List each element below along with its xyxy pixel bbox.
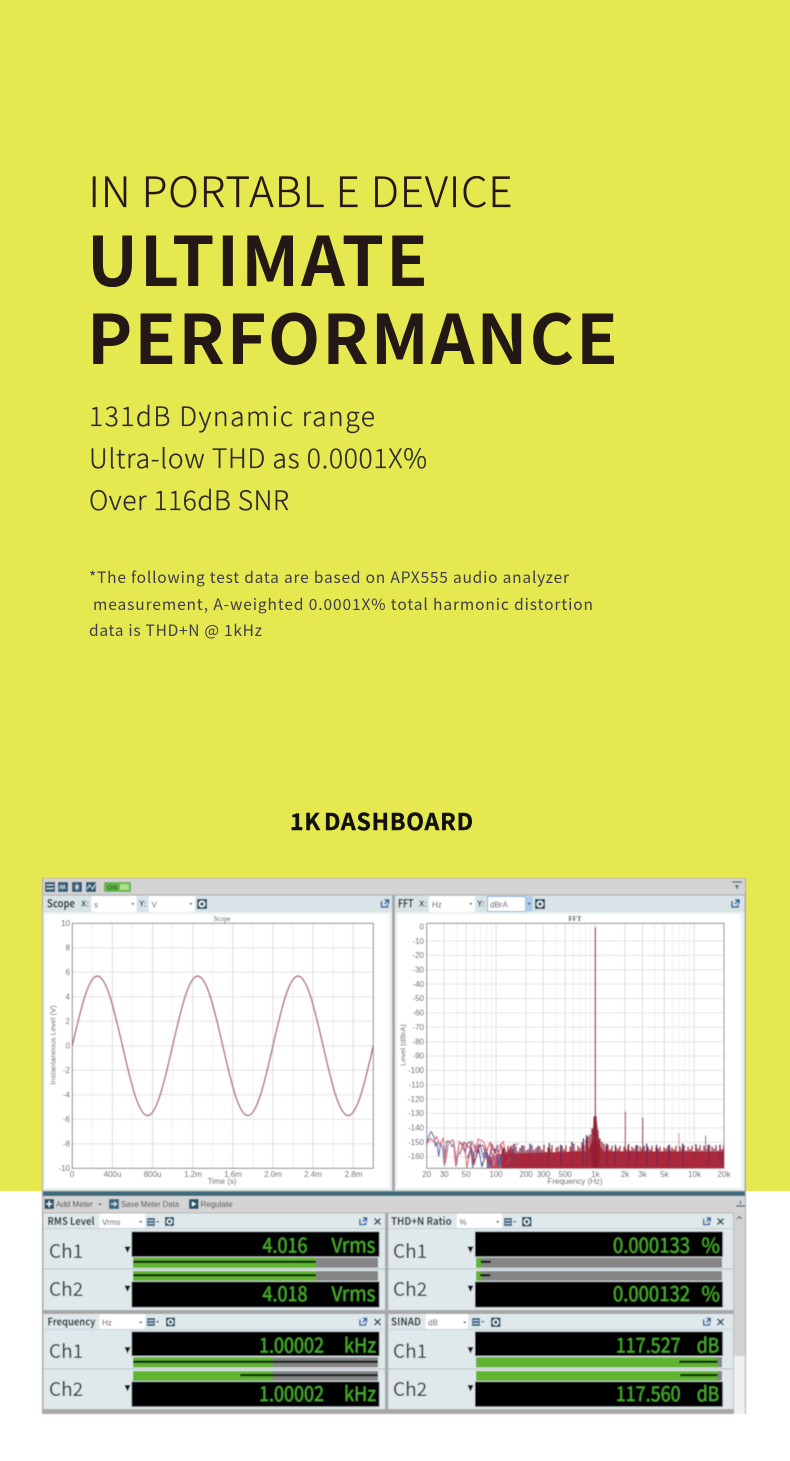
- panel: FFT: [395, 896, 744, 1190]
- FFT x axis labels: Frequency (Hz): [547, 1177, 603, 1186]
- panel: FFT: FFT: [568, 915, 582, 923]
- scope x axis labels: 400u: [104, 1170, 121, 1179]
- meter: THD+N ratio: [388, 1213, 733, 1310]
- scope y axis labels: 10: [61, 919, 71, 928]
- meter: THD+N ratio: Ch2: [393, 1275, 427, 1302]
- FFT header: X:: [419, 900, 427, 908]
- panel: FFT: Level (dBrA): [398, 1024, 408, 1066]
- harmonic spurs: [624, 1112, 627, 1152]
- meter: SINAD: [388, 1314, 733, 1409]
- meter: THD+N ratio: %: [702, 1278, 720, 1307]
- FFT y axis labels: -140: [408, 1124, 425, 1132]
- meter: frequency: kHz: [344, 1378, 376, 1407]
- meter: RMS level: 4.016: [262, 1230, 308, 1258]
- FFT y axis labels: -30: [412, 966, 425, 974]
- scope header: Y:: [139, 900, 146, 908]
- readout ch2: [132, 1282, 379, 1307]
- feature list: [89, 395, 427, 518]
- scope header: s: [94, 900, 98, 910]
- meter: SINAD: dB: [697, 1329, 719, 1358]
- meter: SINAD: dB: [428, 1318, 438, 1328]
- meter: SINAD: SINAD: [391, 1314, 421, 1330]
- heading block: [87, 159, 618, 384]
- meter: THD+N ratio: Ch1: [393, 1237, 427, 1264]
- FFT x axis labels: 30: [440, 1170, 449, 1179]
- noise floor backing: [487, 1138, 724, 1168]
- meter: SINAD: Ch1: [393, 1337, 427, 1364]
- scope sine wave: [72, 976, 373, 1116]
- FFT y axis labels: -80: [412, 1038, 425, 1046]
- FFT header: Hz: [432, 900, 442, 910]
- meter: SINAD: Ch2: [393, 1375, 427, 1402]
- meter: RMS level: Vrms: [332, 1230, 376, 1258]
- analyzer screenshot: [42, 878, 746, 1414]
- meter: RMS level: [44, 1213, 385, 1310]
- meter: RMS level: Vrms: [102, 1218, 120, 1227]
- scope x axis labels: 2.0m: [264, 1170, 282, 1179]
- FFT y axis labels: -160: [408, 1152, 425, 1161]
- FFT x axis labels: 20k: [718, 1170, 731, 1179]
- readout ch1: [132, 1232, 379, 1257]
- footnote text: measurement, A-weighted 0.0001X% total harmonic distortion: [93, 593, 593, 615]
- scope x axis labels: 2.8m: [345, 1170, 363, 1179]
- meter: THD+N ratio: 0.000132: [613, 1278, 690, 1307]
- red noise comb: [502, 1117, 724, 1168]
- scope header: Scope: [47, 896, 75, 912]
- scrollbar: [734, 1212, 745, 1414]
- FFT x axis labels: 300: [537, 1170, 551, 1179]
- FFT y axis labels: -110: [409, 1080, 425, 1090]
- section heading: 1K dashboard: 1K DASHBOARD: [290, 803, 473, 837]
- panel: scope: Instantaneous Level (V): [48, 1005, 58, 1085]
- scope y axis labels: -8: [63, 1140, 71, 1148]
- scope header: V: [152, 900, 158, 910]
- panel: scope: Scope: [213, 915, 231, 923]
- FFT spectrum traces: [427, 927, 724, 1168]
- footnote text: *The following test data are based on APX555 audio analyzer: [89, 566, 570, 588]
- FFT x axis labels: 10k: [688, 1170, 702, 1179]
- FFT y axis labels: -40: [412, 980, 425, 989]
- FFT x axis labels: 20: [422, 1170, 432, 1179]
- FFT header: Y:: [477, 900, 484, 908]
- fundamental 1 kHz peak: [593, 927, 597, 1168]
- footnote text: data is THD+N @ 1kHz: [89, 619, 262, 641]
- FFT y axis labels: -20: [412, 951, 425, 960]
- blue noise tops: [514, 1135, 720, 1165]
- meter: frequency: [44, 1314, 385, 1409]
- FFT x axis labels: 100: [489, 1170, 503, 1179]
- FFT y axis labels: -90: [412, 1052, 425, 1060]
- feature: dynamic range: 131dB Dynamic range: [89, 395, 375, 434]
- top toolbar: [43, 878, 745, 894]
- meter: THD+N ratio: 0.000133: [613, 1230, 690, 1258]
- scope x axis labels: Time (s): [207, 1177, 237, 1186]
- meter toolbar: Save Meter Data: [121, 1200, 180, 1209]
- FFT y axis labels: -70: [412, 1023, 425, 1032]
- scope x axis labels: 800u: [144, 1170, 161, 1179]
- scope x axis labels: [70, 1170, 363, 1186]
- scope x axis labels: 2.4m: [304, 1170, 322, 1179]
- FFT y axis labels: [408, 922, 425, 1161]
- meter: RMS level: RMS Level: [48, 1214, 95, 1229]
- feature: SNR: Over 116dB SNR: [89, 479, 289, 518]
- meter: THD+N ratio: %: [460, 1218, 467, 1227]
- meter: frequency: 1.00002: [259, 1329, 324, 1358]
- eyebrow: in portable device: IN PORTABL E DEVICE: [88, 159, 512, 220]
- FFT y axis labels: -120: [408, 1095, 425, 1104]
- meter: SINAD: dB: [697, 1378, 719, 1407]
- blue low-frequency traces: [427, 1132, 514, 1168]
- scope y axis labels: 6: [66, 968, 71, 977]
- red low-frequency traces: [427, 1137, 518, 1168]
- meter: frequency: Ch1: [49, 1337, 83, 1364]
- scope y axis labels: -4: [63, 1090, 71, 1100]
- FFT y axis labels: -60: [412, 1008, 425, 1018]
- title line: ultimate: ULTIMATE: [87, 207, 428, 306]
- title line: performance: PERFORMANCE: [87, 285, 618, 384]
- scope y axis labels: -10: [58, 1164, 71, 1173]
- FFT x axis labels: 500: [559, 1170, 572, 1179]
- scope y axis labels: -6: [63, 1115, 71, 1124]
- FFT y axis labels: -100: [408, 1066, 425, 1075]
- FFT x axis labels: 1k: [591, 1170, 601, 1179]
- footnote text: [89, 566, 593, 641]
- meter: SINAD: 117.527: [616, 1329, 681, 1358]
- FFT header: [398, 896, 739, 912]
- scope y axis labels: 2: [66, 1017, 71, 1026]
- scope plot grid: [72, 923, 373, 1168]
- meter: frequency: 1.00002: [259, 1378, 324, 1407]
- FFT x axis labels: 5k: [660, 1170, 670, 1179]
- FFT x axis labels: 2k: [621, 1170, 630, 1179]
- top toolbar: ON: [107, 885, 118, 892]
- channel labels: Ch1: [49, 1237, 83, 1264]
- FFT y axis labels: -10: [412, 937, 425, 946]
- FFT y axis labels: -130: [408, 1109, 425, 1118]
- FFT plot grid: [427, 923, 724, 1168]
- meter: THD+N ratio: %: [702, 1230, 720, 1258]
- bars: [133, 1258, 378, 1268]
- meter toolbar: [43, 1196, 745, 1212]
- meter: frequency: kHz: [344, 1329, 376, 1358]
- meter: RMS level: Ch2: [49, 1275, 83, 1302]
- meter: THD+N ratio: THD+N Ratio: [391, 1214, 452, 1229]
- scope header: X:: [81, 900, 89, 908]
- meter: SINAD: 117.560: [616, 1378, 681, 1407]
- scope y axis labels: [58, 919, 71, 1173]
- scope y axis labels: 8: [66, 944, 71, 952]
- meter: frequency: Ch2: [49, 1375, 83, 1402]
- divider bar: [43, 1192, 745, 1196]
- FFT y axis labels: -50: [412, 994, 425, 1003]
- FFT x axis labels: 3k: [638, 1170, 648, 1179]
- FFT x axis labels: 50: [462, 1170, 471, 1179]
- FFT x axis labels: 200: [519, 1170, 533, 1179]
- meter: frequency: Frequency: [48, 1314, 96, 1330]
- panel: scope: [43, 896, 392, 1190]
- FFT y axis labels: 0: [420, 922, 425, 932]
- scope x axis labels: 1.6m: [224, 1170, 242, 1179]
- FFT y axis labels: -150: [408, 1138, 425, 1147]
- feature: THD: Ultra-low THD as 0.0001X%: [89, 437, 427, 476]
- scope x axis labels: 1.2m: [184, 1170, 202, 1179]
- FFT x axis labels: [422, 1170, 731, 1186]
- meter toolbar: Add Meter: [56, 1200, 93, 1209]
- 1 kHz skirt: [590, 1116, 601, 1168]
- FFT header: FFT: [398, 896, 414, 912]
- scope x axis labels: 0: [70, 1170, 75, 1179]
- scope y axis labels: 0: [66, 1042, 71, 1050]
- meter: frequency: Hz: [102, 1318, 112, 1328]
- meter toolbar: Regulate: [200, 1200, 233, 1209]
- scope y axis labels: 4: [66, 992, 71, 1002]
- scope y axis labels: -2: [63, 1066, 71, 1075]
- meter: RMS level: 4.018: [262, 1278, 308, 1307]
- meter: RMS level: Vrms: [332, 1278, 376, 1307]
- scope header: [47, 896, 388, 912]
- FFT header: dBrA: [490, 900, 508, 910]
